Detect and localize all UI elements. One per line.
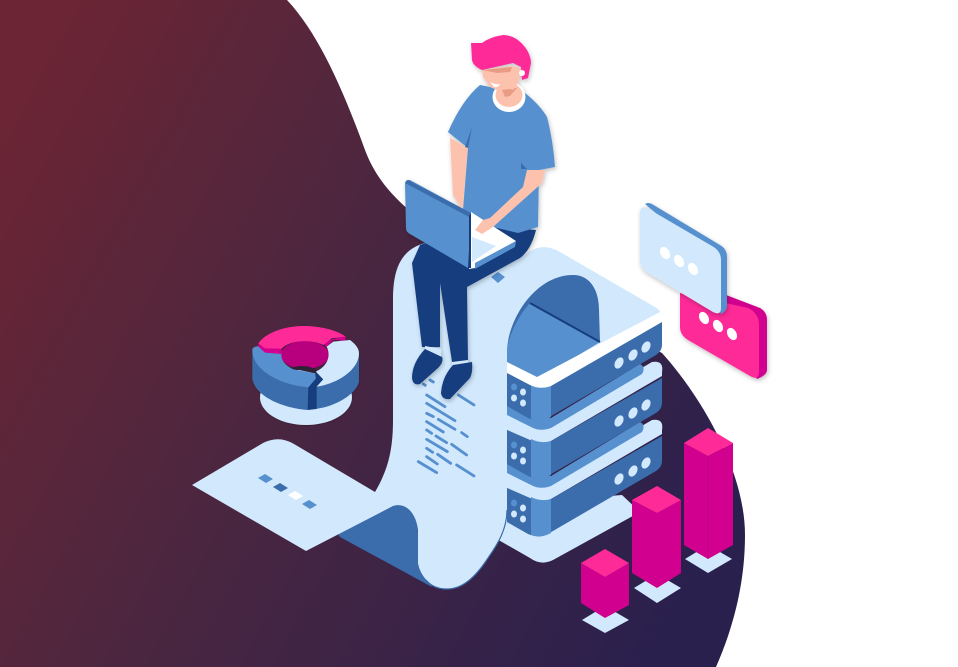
bar tall: [684, 428, 733, 573]
bar medium: [632, 486, 681, 603]
server unit 1: [507, 312, 663, 421]
person: [405, 35, 555, 399]
t-shirt: [448, 85, 555, 233]
left arm: [450, 138, 468, 210]
chat bubble pink: [680, 285, 767, 379]
bar small: [581, 549, 629, 633]
shadow strip between unit 2 and 3: [507, 422, 644, 488]
shadow strip between unit 1 and 2: [507, 364, 644, 430]
server unit 3: [507, 420, 662, 537]
laptop lid: [405, 180, 471, 268]
paper curl underside: [337, 505, 432, 587]
server unit 2: [507, 362, 662, 479]
base plate under server: [495, 495, 640, 563]
bar chart: [581, 428, 733, 633]
laptop base: [469, 212, 516, 269]
paper code lines: [418, 380, 474, 476]
paper sheet: [192, 243, 662, 589]
paper edge line: [426, 510, 507, 589]
right arm: [475, 170, 545, 234]
background blob: [0, 0, 745, 667]
head: [471, 35, 531, 112]
paper footer squares: [258, 474, 317, 509]
paper small square: [491, 272, 505, 283]
chat bubble blue: [640, 203, 727, 314]
trousers and shoes: [412, 225, 536, 399]
donut chart: [252, 326, 359, 425]
server arch: [507, 275, 600, 380]
long paper strip and server top: [192, 243, 662, 589]
